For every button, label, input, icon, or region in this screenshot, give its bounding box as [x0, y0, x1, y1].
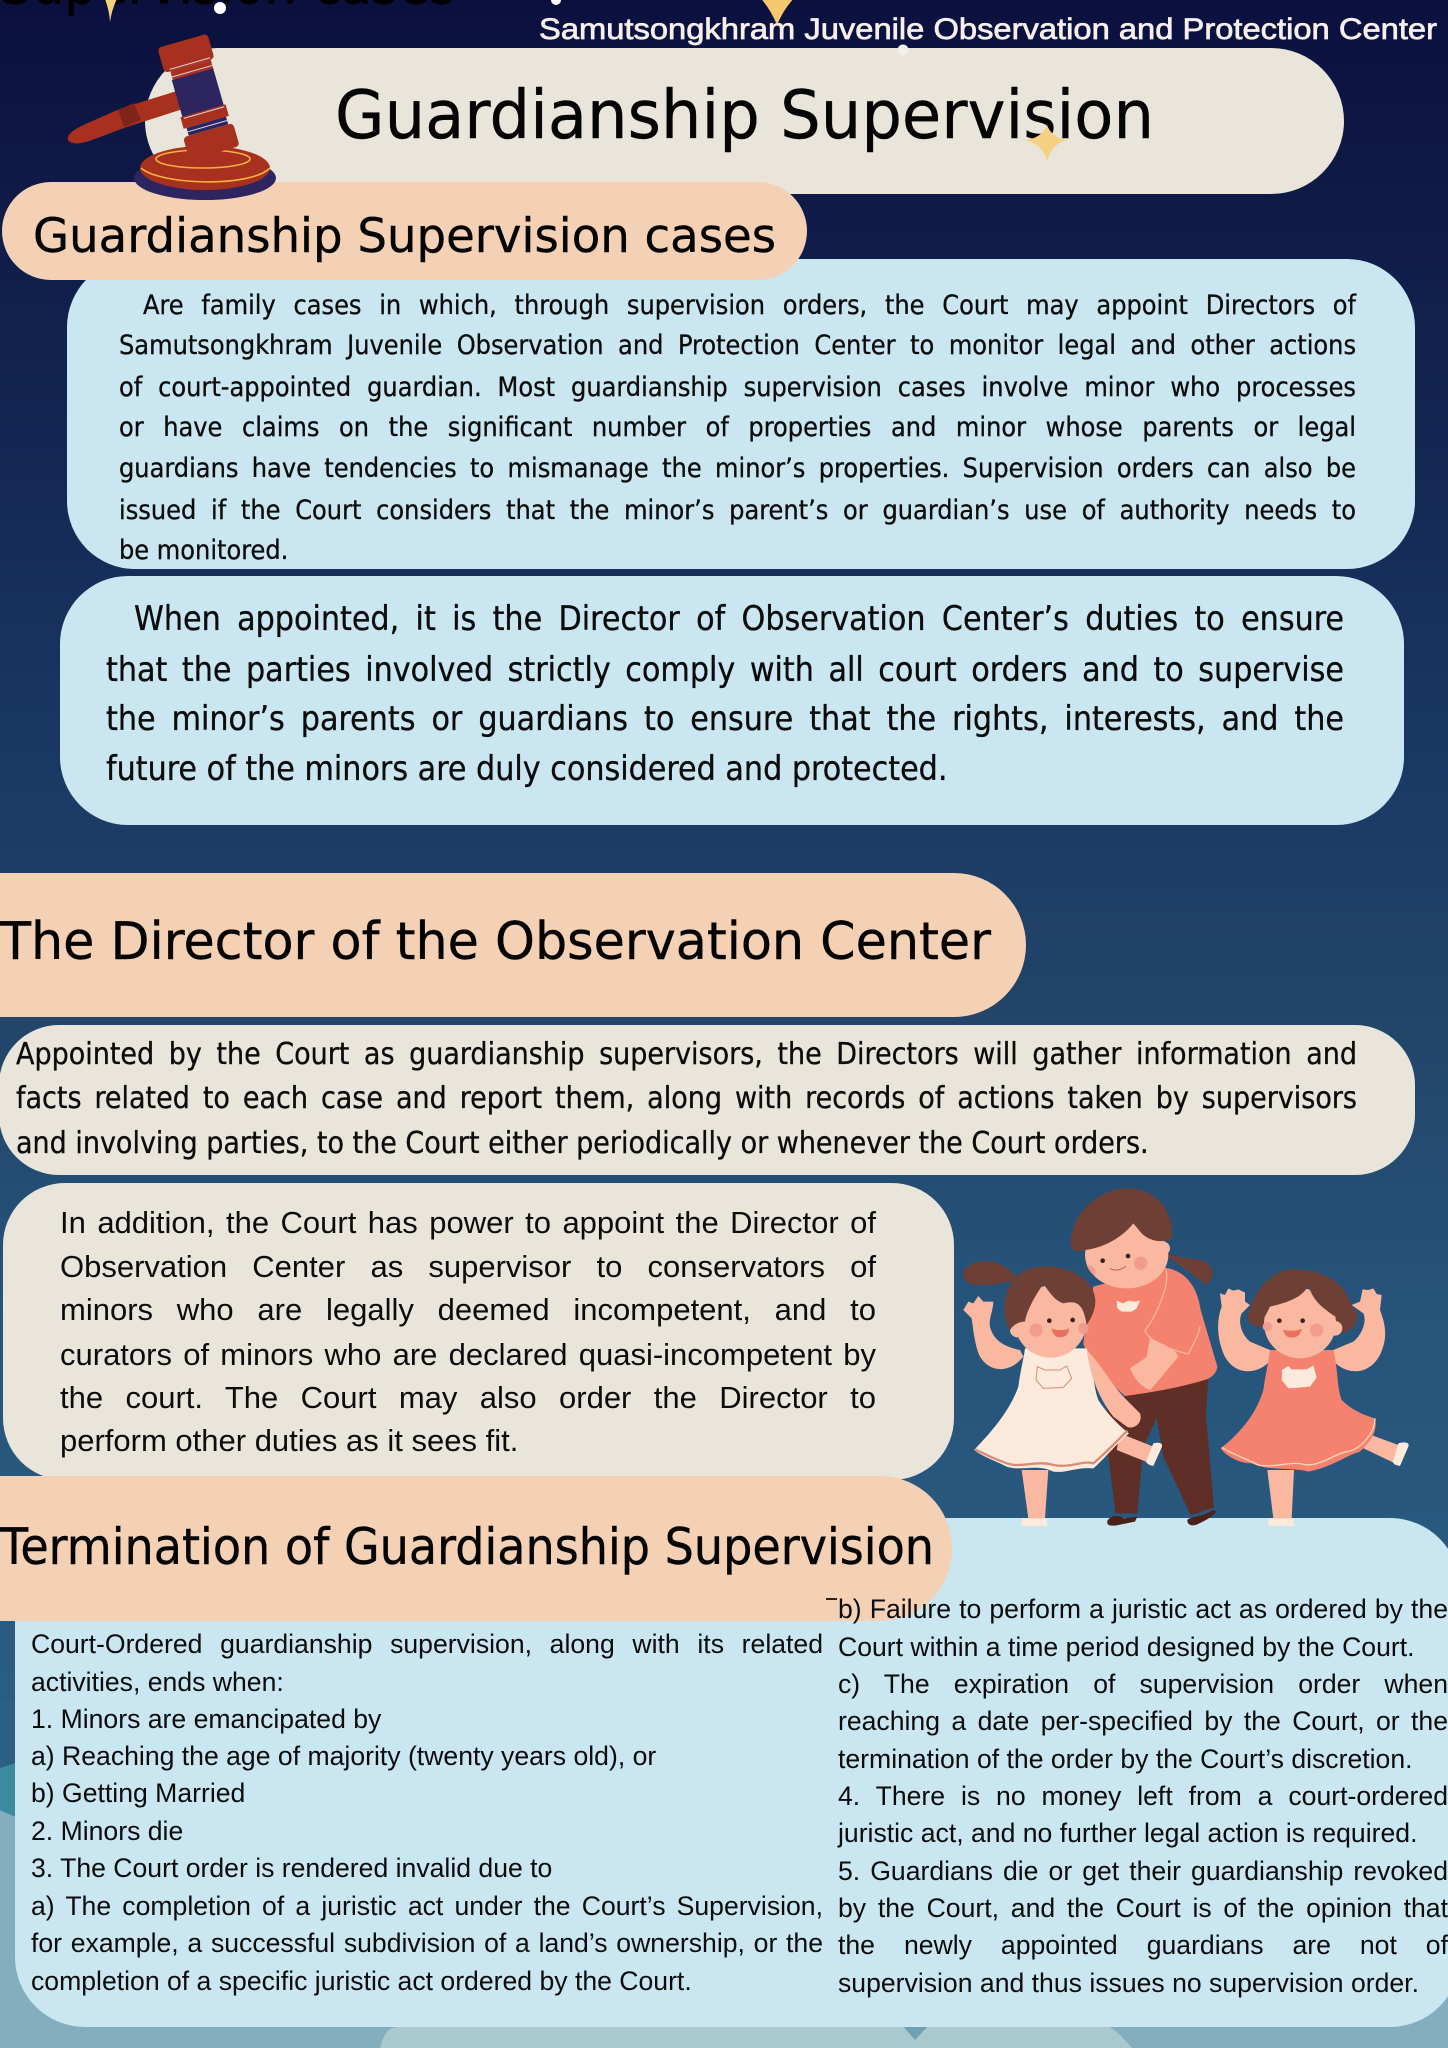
text column: left: activities, ends when:: [31, 1667, 284, 1697]
text column: left: 1. Minors are emancipated by: [31, 1704, 381, 1734]
text column: right: 4. There is no money left from a court-ordered: [838, 1781, 1448, 1811]
panel: director appointment: [0, 1025, 1415, 1175]
text column: right: 5. Guardians die or get their guardianship revoked: [838, 1856, 1448, 1886]
panel: additional powers: the court. The Court may also order the Director to: [60, 1380, 876, 1415]
panel: definition of cases: [67, 259, 1415, 569]
panel: definition of cases: issued if the Court considers that the minor’s parent’s or guardian’s use of authority needs to: [119, 495, 1356, 526]
panel: additional powers: curators of minors who are declared quasi-incompetent by: [60, 1337, 876, 1372]
panel: definition of cases: Samutsongkhram Juvenile Observation and Protection Center to monitor legal and other actions: [119, 330, 1356, 361]
heading pill: The Director of the Observation Center: The Director of the Observation Center: [0, 912, 992, 972]
panel: definition of cases: be monitored.: [119, 535, 288, 566]
text column: left: b) Getting Married: [31, 1778, 245, 1808]
panel: definition of cases: or have claims on the significant number of properties and minor whose parents or legal: [119, 412, 1356, 443]
panel: additional powers: In addition, the Court has power to appoint the Director of: [60, 1205, 876, 1240]
title: Guardianship Supervision: [335, 76, 1154, 154]
text column: left: completion of a specific juristic act ordered by the Court.: [31, 1966, 692, 1996]
text column: left: 2. Minors die: [31, 1816, 183, 1846]
panel: duties of the director: that the parties involved strictly comply with all court orders and to supervise: [106, 650, 1344, 689]
panel: director appointment: Appointed by the Court as guardianship supervisors, the Directors will gather information and: [16, 1037, 1357, 1072]
panel: definition of cases: of court-appointed guardian. Most guardianship supervision cases involve minor who processes: [119, 372, 1356, 403]
panel: additional powers: [3, 1183, 954, 1480]
text column: left: 3. The Court order is rendered invalid due to: [31, 1853, 552, 1883]
heading pill: Termination of Guardianship Supervision: Termination of Guardianship Supervision: [0, 1518, 934, 1576]
text column: left: Court-Ordered guardianship supervision, along with its related: [31, 1629, 823, 1659]
text column: right: supervision and thus issues no supervision order.: [838, 1968, 1419, 1998]
mother: [1071, 1188, 1217, 1526]
heading pill: Guardianship Supervision cases: [2, 182, 807, 280]
panel: termination conditions: [15, 1518, 1448, 2027]
panel: additional powers: Observation Center as supervisor to conservators of: [60, 1249, 876, 1284]
text column: right: juristic act, and no further legal action is required.: [838, 1818, 1417, 1848]
panel: duties of the director: the minor’s parents or guardians to ensure that the rights, interests, and the: [106, 699, 1344, 738]
illustration: mother and two children: [963, 1188, 1409, 1526]
panel: duties of the director: [60, 576, 1404, 825]
text column: right: b) Failure to perform a juristic act as ordered by the: [838, 1594, 1448, 1624]
text column: right: reaching a date per-specified by the Court, or the: [838, 1706, 1448, 1736]
text column: left: [31, 1629, 823, 1996]
panel: duties of the director: future of the minors are duly considered and protected.: [106, 749, 947, 788]
text column: right: termination of the order by the Court’s discretion.: [838, 1744, 1413, 1774]
heading pill: The Director of the Observation Center: [0, 873, 1026, 1017]
title pill: [145, 48, 1344, 194]
panel: definition of cases: Are family cases in which, through supervision orders, the Court may appoint Directors of: [143, 290, 1356, 321]
text column: right: by the Court, and the Court is of the opinion that: [838, 1893, 1448, 1923]
panel: additional powers: perform other duties as it sees fit.: [60, 1423, 518, 1458]
heading pill: Guardianship Supervision cases: Guardianship Supervision cases: [33, 209, 776, 264]
child in coral dress: [1218, 1269, 1409, 1526]
panel: director appointment: and involving parties, to the Court either periodically or whenever the Court orders.: [16, 1126, 1149, 1161]
text column: right: the newly appointed guardians are not of: [838, 1930, 1448, 1960]
panel: director appointment: facts related to each case and report them, along with records of actions taken by supervisors: [16, 1081, 1357, 1116]
heading pill: Termination of Guardianship Supervision: [0, 1476, 952, 1621]
subtitle: centre name: Samutsongkhram Juvenile Observation and Protection Center: [539, 13, 1437, 46]
panel: duties of the director: When appointed, it is the Director of Observation Center’s duties to ensure: [134, 599, 1344, 638]
text column: right: Court within a time period designed by the Court.: [838, 1632, 1415, 1662]
text column: left: a) The completion of a juristic act under the Court’s Supervision,: [31, 1891, 823, 1921]
text column: left: a) Reaching the age of majority (twenty years old), or: [31, 1741, 656, 1771]
text column: left: for example, a successful subdivision of a land’s ownership, or the: [31, 1928, 823, 1958]
panel: definition of cases: guardians have tendencies to mismanage the minor’s properties. Supervision orders can also be: [119, 453, 1356, 484]
child in white dress: [963, 1261, 1162, 1526]
panel: additional powers: minors who are legally deemed incompetent, and to: [60, 1292, 876, 1327]
text column: right: c) The expiration of supervision order when: [838, 1669, 1448, 1699]
text column: right: [826, 1594, 1448, 1998]
